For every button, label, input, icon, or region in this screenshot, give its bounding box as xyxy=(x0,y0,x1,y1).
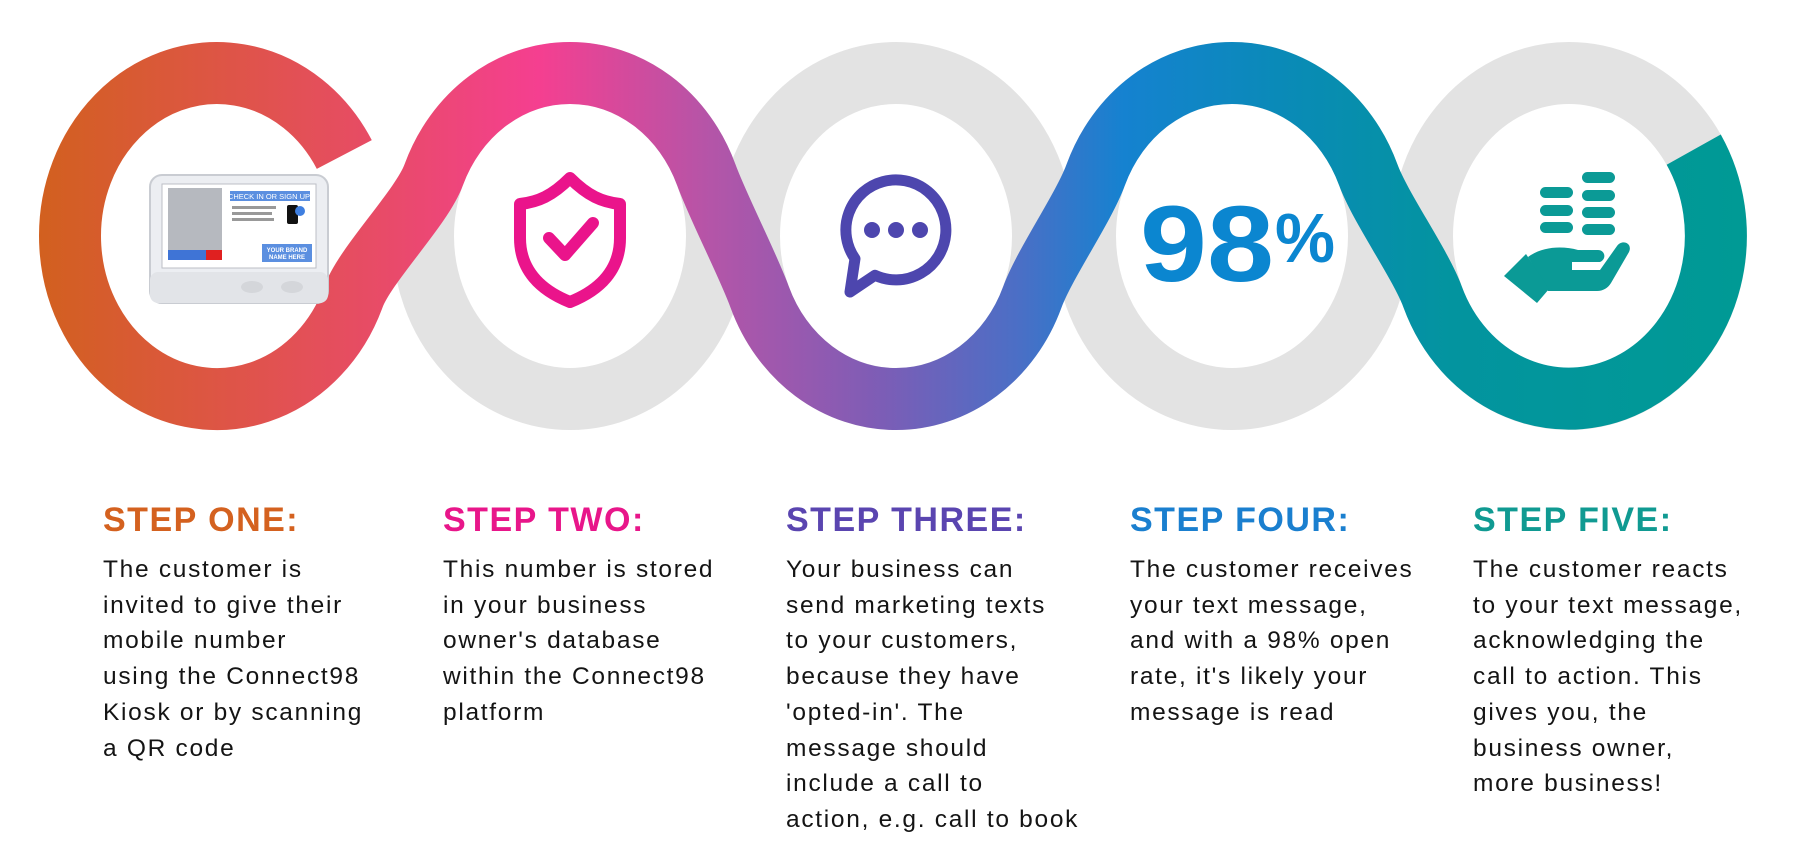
step two: in your business xyxy=(443,592,647,619)
step five: acknowledging the xyxy=(1473,627,1705,654)
icon: hand with coins xyxy=(1504,172,1630,303)
icon: kiosk: NAME HERE xyxy=(269,255,305,261)
step two xyxy=(443,501,714,726)
step four: your text message, xyxy=(1130,592,1368,619)
step three: because they have xyxy=(786,663,1021,690)
step four: The customer receives xyxy=(1130,556,1414,583)
icon: kiosk: YOUR BRAND xyxy=(267,248,308,254)
step four: rate, it's likely your xyxy=(1130,663,1368,690)
step two: platform xyxy=(443,699,545,726)
step two: within the Connect98 xyxy=(443,663,706,690)
step two: STEP TWO: xyxy=(443,501,645,539)
step one: a QR code xyxy=(103,735,235,762)
step one: mobile number xyxy=(103,627,287,654)
step two: This number is stored xyxy=(443,556,714,583)
step four: message is read xyxy=(1130,699,1335,726)
step three: message should xyxy=(786,735,988,762)
icon: 98%: % xyxy=(1275,199,1335,277)
icon: 98%: 98 xyxy=(1140,183,1274,304)
step one: The customer is xyxy=(103,556,303,583)
step three: send marketing texts xyxy=(786,592,1046,619)
step three xyxy=(786,501,1079,833)
step one: using the Connect98 xyxy=(103,663,360,690)
diagram: ribbon with icons xyxy=(39,42,1747,430)
step two: owner's database xyxy=(443,627,661,654)
step four xyxy=(1130,501,1414,726)
step five: The customer reacts xyxy=(1473,556,1729,583)
step one: Kiosk or by scanning xyxy=(103,699,363,726)
step five xyxy=(1473,501,1743,797)
gradient ribbon path xyxy=(70,73,1716,399)
step three: include a call to xyxy=(786,770,984,797)
step one xyxy=(103,501,363,762)
step three: 'opted-in'. The xyxy=(786,699,965,726)
step five: more business! xyxy=(1473,770,1663,797)
icon: chat bubble xyxy=(846,180,946,292)
step one: invited to give their xyxy=(103,592,343,619)
step four: STEP FOUR: xyxy=(1130,501,1350,539)
step five: gives you, the xyxy=(1473,699,1648,726)
step five: business owner, xyxy=(1473,735,1674,762)
step three: action, e.g. call to book xyxy=(786,806,1079,833)
step four: and with a 98% open xyxy=(1130,627,1391,654)
step three: STEP THREE: xyxy=(786,501,1027,539)
grey rings xyxy=(423,73,1716,399)
step five: to your text message, xyxy=(1473,592,1743,619)
icon: kiosk: CHECK IN OR SIGN UP! xyxy=(228,192,312,201)
step one: STEP ONE: xyxy=(103,501,299,539)
icon: kiosk xyxy=(150,175,328,303)
icon: 98% xyxy=(1140,183,1335,304)
step three: Your business can xyxy=(786,556,1014,583)
step three: to your customers, xyxy=(786,627,1018,654)
icon: shield with check xyxy=(520,178,620,302)
step five: STEP FIVE: xyxy=(1473,501,1673,539)
step five: call to action. This xyxy=(1473,663,1703,690)
